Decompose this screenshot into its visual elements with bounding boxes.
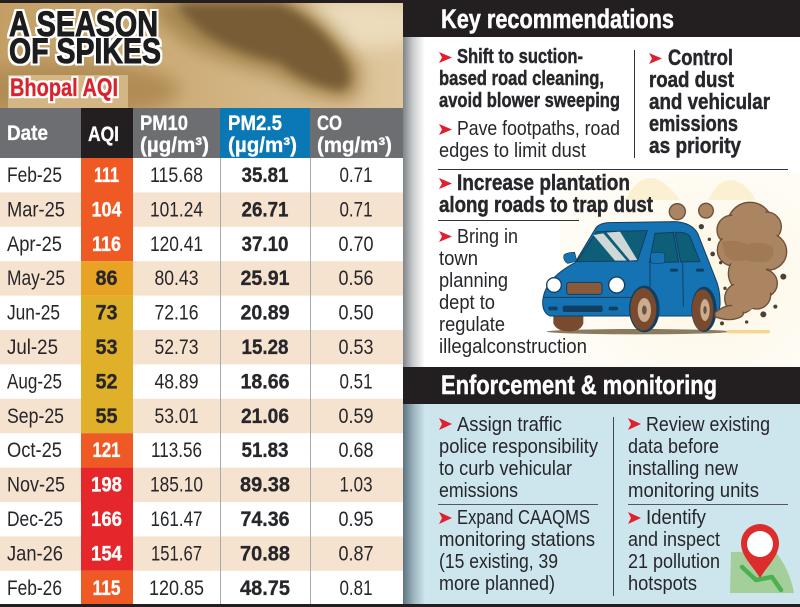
item: CAAQMS stations: more planned) (439, 572, 555, 595)
recommendation: pave footpaths (439, 117, 620, 162)
table rows: 0.68 (338, 439, 374, 462)
table rows: 51.83 (242, 439, 288, 462)
table rows: 101.24 (150, 198, 203, 221)
table rows: 0.53 (338, 336, 374, 359)
title: OF SPIKES (9, 32, 161, 71)
item: CAAQMS stations: (15 existing, 39 (439, 550, 558, 573)
table rows: 185.10 (150, 474, 203, 497)
table rows: 0.71 (340, 164, 372, 187)
table rows: 20.89 (240, 302, 290, 325)
recommendation: pave footpaths: edges to limit dust (439, 139, 586, 162)
table rows: 21.06 (241, 405, 289, 428)
item: pollution hotspots: and inspect (628, 528, 720, 551)
subtitle: Bhopal AQI: Bhopal AQI (10, 74, 118, 102)
table rows: 37.10 (242, 233, 288, 256)
recommendation: plantation (439, 170, 653, 217)
table rows: Oct-25 (7, 439, 62, 462)
table rows: 74.36 (240, 508, 290, 531)
recommendation: control road dust: Control (668, 45, 733, 70)
recommendation: town planning: Bring in (457, 225, 518, 248)
title (9, 5, 161, 71)
table rows: 70.88 (240, 542, 290, 565)
item: pollution hotspots: Identify (646, 506, 707, 529)
top black strip (0, 0, 403, 3)
table rows: 0.59 (338, 405, 374, 428)
table rows: 1.03 (340, 474, 372, 497)
item: review data (628, 413, 770, 502)
table rows: 0.50 (338, 302, 374, 325)
table rows: Jan-26 (7, 542, 63, 565)
table header: PM10 (140, 112, 188, 135)
recommendation: town planning: dept to (439, 291, 495, 314)
table rows: 113.56 (151, 439, 202, 462)
table rows: 25.91 (240, 267, 290, 290)
table rows: Feb-26 (7, 577, 62, 600)
item: traffic police: to curb vehicular (439, 457, 572, 480)
item: traffic police: Assign traffic (457, 413, 562, 436)
table rows: 166 (91, 508, 122, 531)
table rows: 151.67 (151, 542, 202, 565)
recommendation: pave footpaths: Pave footpaths, road (457, 117, 620, 140)
table rows: 104 (92, 198, 122, 221)
table rows: 154 (91, 542, 122, 565)
recommendation: suction cleaning (439, 45, 620, 112)
table rows: 26.71 (242, 198, 289, 221)
table rows: 161.47 (150, 508, 202, 531)
table rows: Aug-25 (7, 370, 62, 393)
item: pollution hotspots: hotspots (628, 572, 697, 595)
table rows: Sep-25 (7, 405, 64, 428)
recommendation: suction cleaning: based road cleaning, (439, 67, 604, 90)
table rows (0, 158, 403, 604)
recommendation: town planning: planning (439, 269, 508, 292)
heading: key recommendations: Key recommendations (441, 4, 674, 34)
item: CAAQMS stations: monitoring stations (439, 528, 595, 551)
item: traffic police (439, 413, 599, 502)
table rows: 0.51 (340, 370, 372, 393)
table rows: Dec-25 (7, 508, 63, 531)
item: review data: monitoring units (628, 479, 759, 502)
item: review data: data before (628, 435, 719, 458)
table rows: 80.43 (154, 267, 198, 290)
table rows: 120.41 (150, 233, 203, 256)
item: pollution hotspots: 21 pollution (628, 550, 720, 573)
table rows: 48.75 (240, 577, 290, 600)
item: CAAQMS stations (439, 506, 595, 595)
table header: (µg/m³) (228, 134, 297, 157)
recommendation: control road dust: as priority (649, 133, 741, 158)
table rows: May-25 (7, 267, 65, 290)
table rows: 0.95 (338, 508, 374, 531)
table rows: 73 (96, 302, 118, 325)
table rows: Jun-25 (7, 302, 60, 325)
item: traffic police: emissions (439, 479, 518, 502)
table header: CO (317, 112, 342, 135)
table rows: 72.16 (154, 302, 198, 325)
recommendation: plantation: along roads to trap dust (439, 192, 653, 217)
table rows: 86 (96, 267, 118, 290)
table rows: 52.73 (154, 336, 198, 359)
table rows: 53 (96, 336, 118, 359)
recommendation: town planning: town (439, 247, 478, 270)
table header: PM2.5 (228, 112, 282, 135)
table rows: 15.28 (242, 336, 289, 359)
title: A SEASON (9, 5, 158, 44)
table header: AQI (88, 123, 119, 146)
item: review data: installing new (628, 457, 738, 480)
table rows: 89.38 (240, 474, 290, 497)
table rows: 0.56 (338, 267, 374, 290)
heading: enforcement and monitoring: Enforcement & monitoring (441, 370, 717, 400)
table rows: Mar-25 (7, 198, 65, 221)
table rows: 116 (92, 233, 121, 256)
recommendation: suction cleaning: Shift to suction- (457, 45, 583, 68)
table rows: Nov-25 (7, 474, 65, 497)
panel: key recommendations (403, 0, 800, 367)
table header: (mg/m³) (317, 134, 392, 157)
table rows: 0.87 (338, 542, 374, 565)
table rows: 0.70 (338, 233, 374, 256)
table rows: Apr-25 (7, 233, 62, 256)
photo banner: smoke plume (0, 3, 403, 108)
panel: enforcement and monitoring (0, 367, 800, 607)
table rows: 111 (94, 164, 119, 187)
table rows: 48.89 (154, 370, 198, 393)
table rows: 0.81 (340, 577, 372, 600)
table header (0, 108, 403, 158)
recommendation: town planning (439, 225, 587, 358)
recommendation: town planning: regulate (439, 313, 505, 336)
table rows: 52 (96, 370, 118, 393)
table rows: 115 (92, 577, 121, 600)
icon: map pin (730, 524, 794, 593)
table rows: 120.85 (149, 577, 204, 600)
table header: Date (7, 122, 48, 145)
item: pollution hotspots (628, 506, 720, 595)
table rows: Feb-25 (7, 164, 62, 187)
table header: (µg/m³) (140, 134, 209, 157)
recommendation: control road dust: road dust (649, 67, 734, 92)
recommendation: plantation: Increase plantation (457, 170, 630, 195)
table rows: 115.68 (150, 164, 203, 187)
table rows: 121 (92, 439, 121, 462)
table rows: 18.66 (240, 370, 290, 393)
item: CAAQMS stations: Expand CAAQMS (457, 506, 590, 529)
item: review data: Review existing (646, 413, 770, 436)
table rows: 53.01 (154, 405, 198, 428)
item: traffic police: police responsibility (439, 435, 599, 458)
recommendation: town planning: illegalconstruction (439, 335, 587, 358)
recommendation: control road dust (649, 45, 770, 158)
recommendation: suction cleaning: avoid blower sweeping (439, 89, 620, 112)
table rows: 55 (96, 405, 118, 428)
table rows: Jul-25 (7, 336, 58, 359)
recommendation: control road dust: emissions (649, 111, 738, 136)
table rows: 35.81 (242, 164, 289, 187)
table rows: 0.71 (340, 198, 372, 221)
recommendation: control road dust: and vehicular (649, 89, 770, 114)
table rows: 198 (91, 474, 122, 497)
icon: polluting car (543, 202, 787, 334)
